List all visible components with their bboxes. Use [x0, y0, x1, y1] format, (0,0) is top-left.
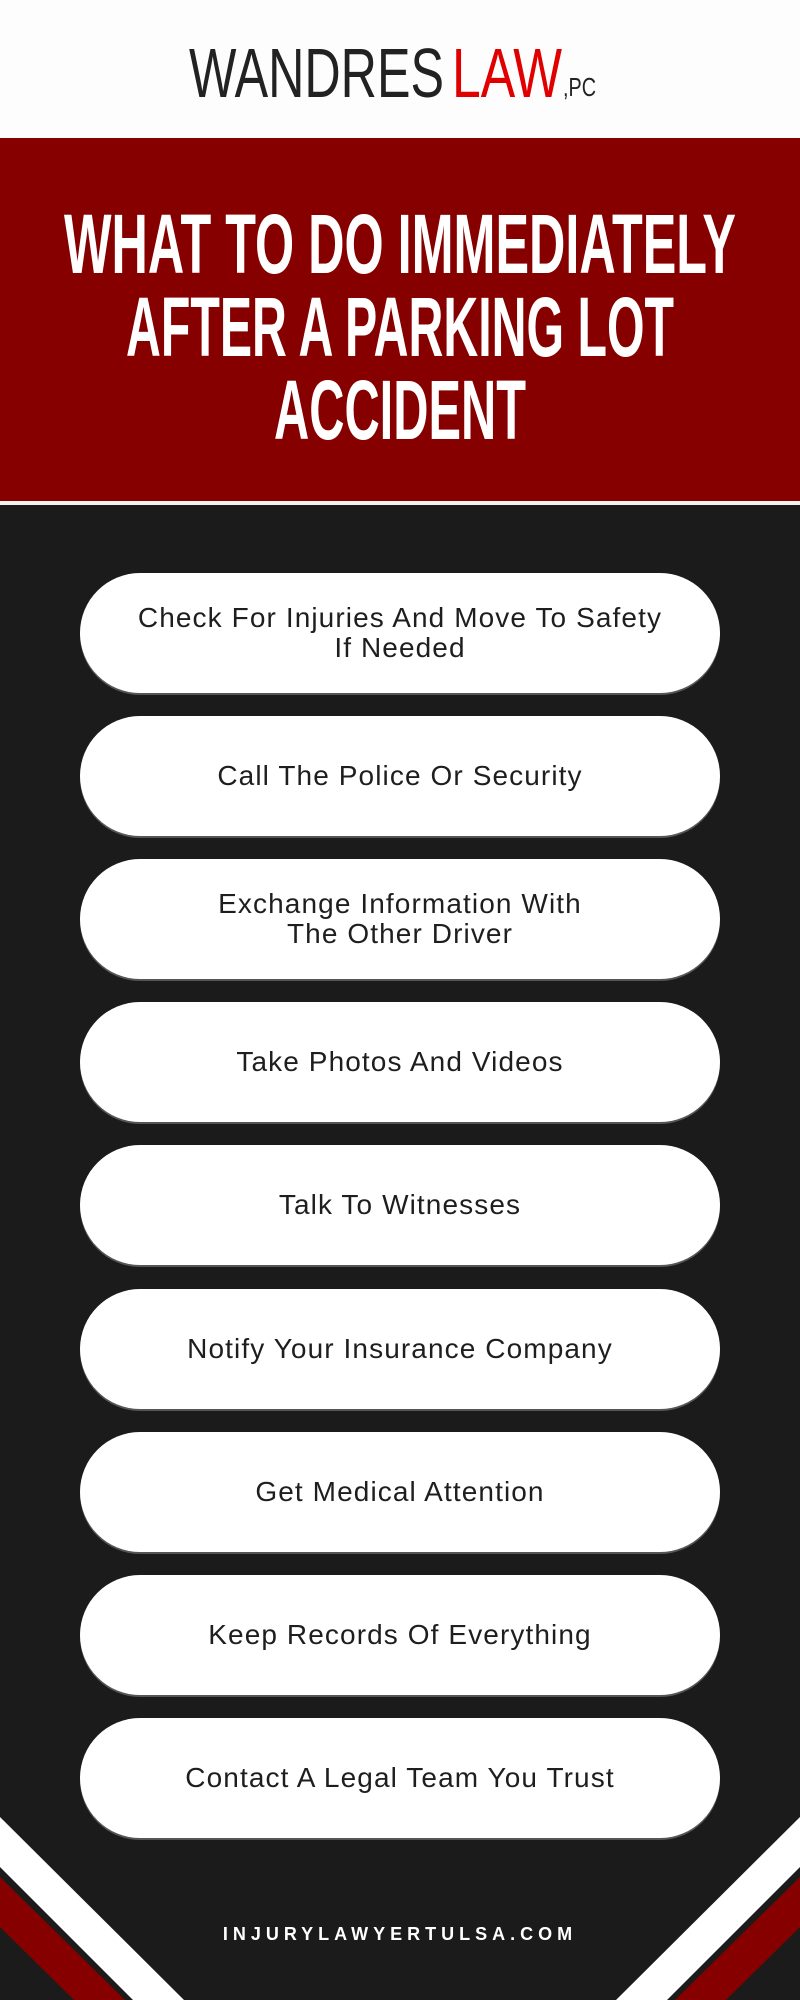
- step 3: [80, 859, 720, 979]
- header background: [0, 0, 800, 138]
- footer url: INJURYLAWYERTULSA.COM: [223, 1924, 577, 1944]
- step 1: Check For Injuries And Move To Safety: [138, 602, 662, 633]
- logo: WANDRES: [189, 34, 444, 112]
- title: ACCIDENT: [274, 363, 526, 457]
- step 9: [80, 1718, 720, 1838]
- title: [64, 197, 736, 457]
- step 3: The Other Driver: [287, 918, 513, 949]
- title band: [0, 138, 800, 501]
- step 4: Take Photos And Videos: [236, 1046, 564, 1077]
- step 8: Keep Records Of Everything: [208, 1619, 592, 1650]
- step 1: If Needed: [334, 632, 466, 663]
- logo: ,PC: [563, 72, 596, 102]
- step 8: [80, 1575, 720, 1695]
- logo: LAW: [452, 34, 562, 112]
- step 7: Get Medical Attention: [255, 1476, 545, 1507]
- step 9: Contact A Legal Team You Trust: [185, 1762, 615, 1793]
- step 5: Talk To Witnesses: [279, 1189, 521, 1220]
- step 7: [80, 1432, 720, 1552]
- step 2: [80, 716, 720, 836]
- step 5: [80, 1145, 720, 1265]
- step 2: Call The Police Or Security: [217, 760, 583, 791]
- step 6: Notify Your Insurance Company: [187, 1333, 613, 1364]
- step 1: [80, 573, 720, 693]
- step 6: [80, 1289, 720, 1409]
- step 4: [80, 1002, 720, 1122]
- step 3: Exchange Information With: [218, 888, 582, 919]
